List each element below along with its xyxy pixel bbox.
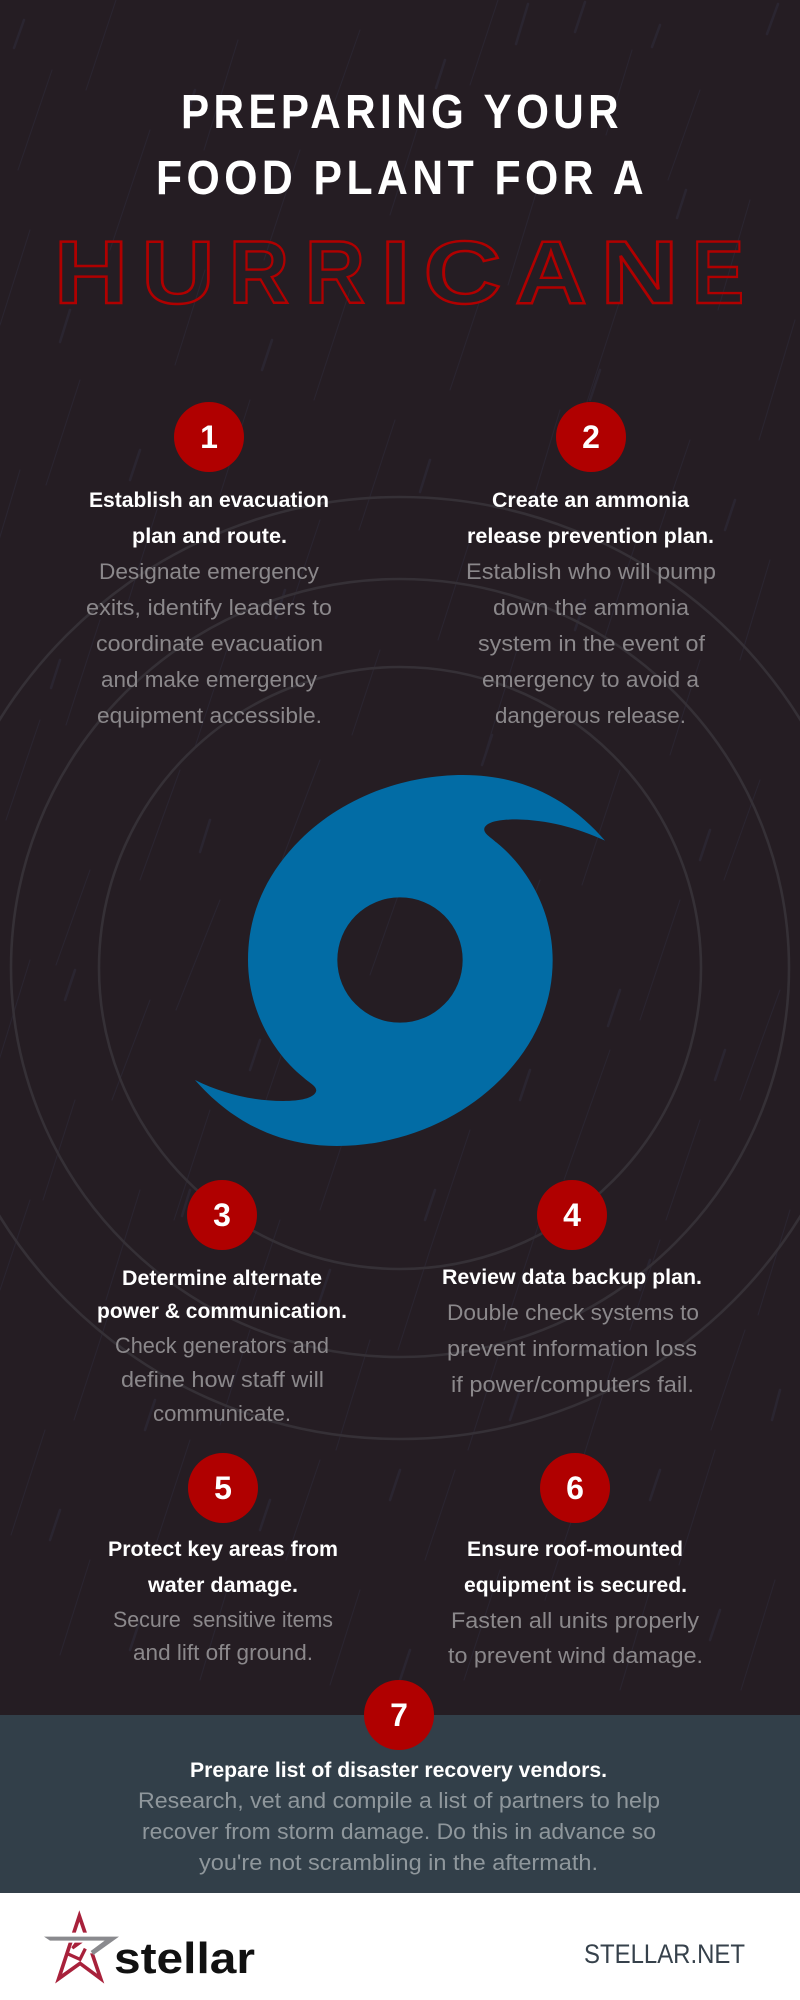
step 1 text: coordinate evacuation [96,631,323,656]
icon: star [44,1916,119,1979]
website: STELLAR.NET [584,1939,745,1969]
title: E [692,222,744,322]
panel: step 1 [86,402,332,728]
step 3 text: define how staff will [121,1367,324,1392]
step 3 text: power & communication. [97,1300,347,1323]
step 1 text: Establish an evacuation [89,489,329,512]
badge 6 [540,1453,610,1523]
step 4 text: prevent information loss [447,1336,697,1361]
step 3 text: Check generators and [115,1333,329,1358]
title: H [54,222,128,322]
step 4 text: if power/computers fail. [451,1372,694,1397]
badge 4: 4 [563,1197,581,1233]
step 3 text: communicate. [153,1401,291,1426]
step 2 text: system in the event of [478,631,706,656]
title: U [142,222,214,322]
title: C [424,222,502,322]
step 1 text: Designate emergency [99,559,319,584]
step 1 text [86,489,332,728]
step 2 text: emergency to avoid a [482,667,700,692]
step 5 text: and lift off ground. [133,1640,313,1665]
step 5 text: water damage. [147,1574,298,1597]
badge 5: 5 [214,1470,232,1506]
badge 1 [174,402,244,472]
step 1 text: equipment accessible. [97,703,322,728]
step 6 text: to prevent wind damage. [448,1643,703,1668]
step 2 text: Create an ammonia [492,489,689,512]
icon: hurricane symbol [195,775,605,1146]
badge 7 [364,1680,434,1750]
title: PREPARING YOUR [181,86,623,139]
badge 2 [556,402,626,472]
title: I [380,222,410,322]
step 2 text: down the ammonia [493,595,690,620]
step 2 text: release prevention plan. [467,525,714,548]
title: R [305,222,365,322]
step 4 text [442,1266,702,1397]
title: A [515,222,587,322]
step 3 text: Determine alternate [122,1267,322,1290]
panel: step 5 [108,1453,338,1665]
step 1 text: plan and route. [132,525,287,548]
badge 1: 1 [200,419,218,455]
badge 6: 6 [566,1470,584,1506]
title: R [229,222,289,322]
badge 4 [537,1180,607,1250]
step 7 text: you're not scrambling in the aftermath. [199,1850,598,1875]
step 2 text [466,489,716,728]
step 6 text: equipment is secured. [464,1574,687,1597]
step 3 text [97,1267,347,1426]
step 2 text: dangerous release. [495,703,686,728]
badge 5 [188,1453,258,1523]
step 1 text: exits, identify leaders to [86,595,332,620]
step 5 text [108,1538,338,1665]
panel: step 7 [0,1680,800,1893]
step 7 text: recover from storm damage. Do this in advance so [142,1819,656,1844]
step 6 text: Ensure roof-mounted [467,1538,683,1561]
badge 3 [187,1180,257,1250]
logo: stellar: stellar [114,1934,255,1983]
step 7 text: Prepare list of disaster recovery vendors. [190,1759,607,1782]
step 7 text [138,1759,660,1875]
badge 7: 7 [390,1697,408,1733]
step 5 text: Protect key areas from [108,1538,338,1561]
panel: step 3 [97,1180,347,1426]
badge 2: 2 [582,419,600,455]
step 7 text: Research, vet and compile a list of partners to help [138,1788,660,1813]
title [54,86,744,322]
step 6 text [448,1538,703,1668]
title: N [600,222,678,322]
step 1 text: and make emergency [101,667,317,692]
step 4 text: Review data backup plan. [442,1266,702,1289]
step 2 text: Establish who will pump [466,559,716,584]
step 6 text: Fasten all units properly [451,1608,699,1633]
logo: stellar [44,1916,255,1983]
step 4 text: Double check systems to [447,1300,699,1325]
panel: step 2 [466,402,716,728]
footer [0,1893,800,2000]
panel: step 4 [442,1180,702,1397]
badge 3: 3 [213,1197,231,1233]
title: FOOD PLANT FOR A [156,152,648,205]
panel: step 6 [448,1453,703,1668]
step 5 text: Secure sensitive items [113,1607,333,1632]
